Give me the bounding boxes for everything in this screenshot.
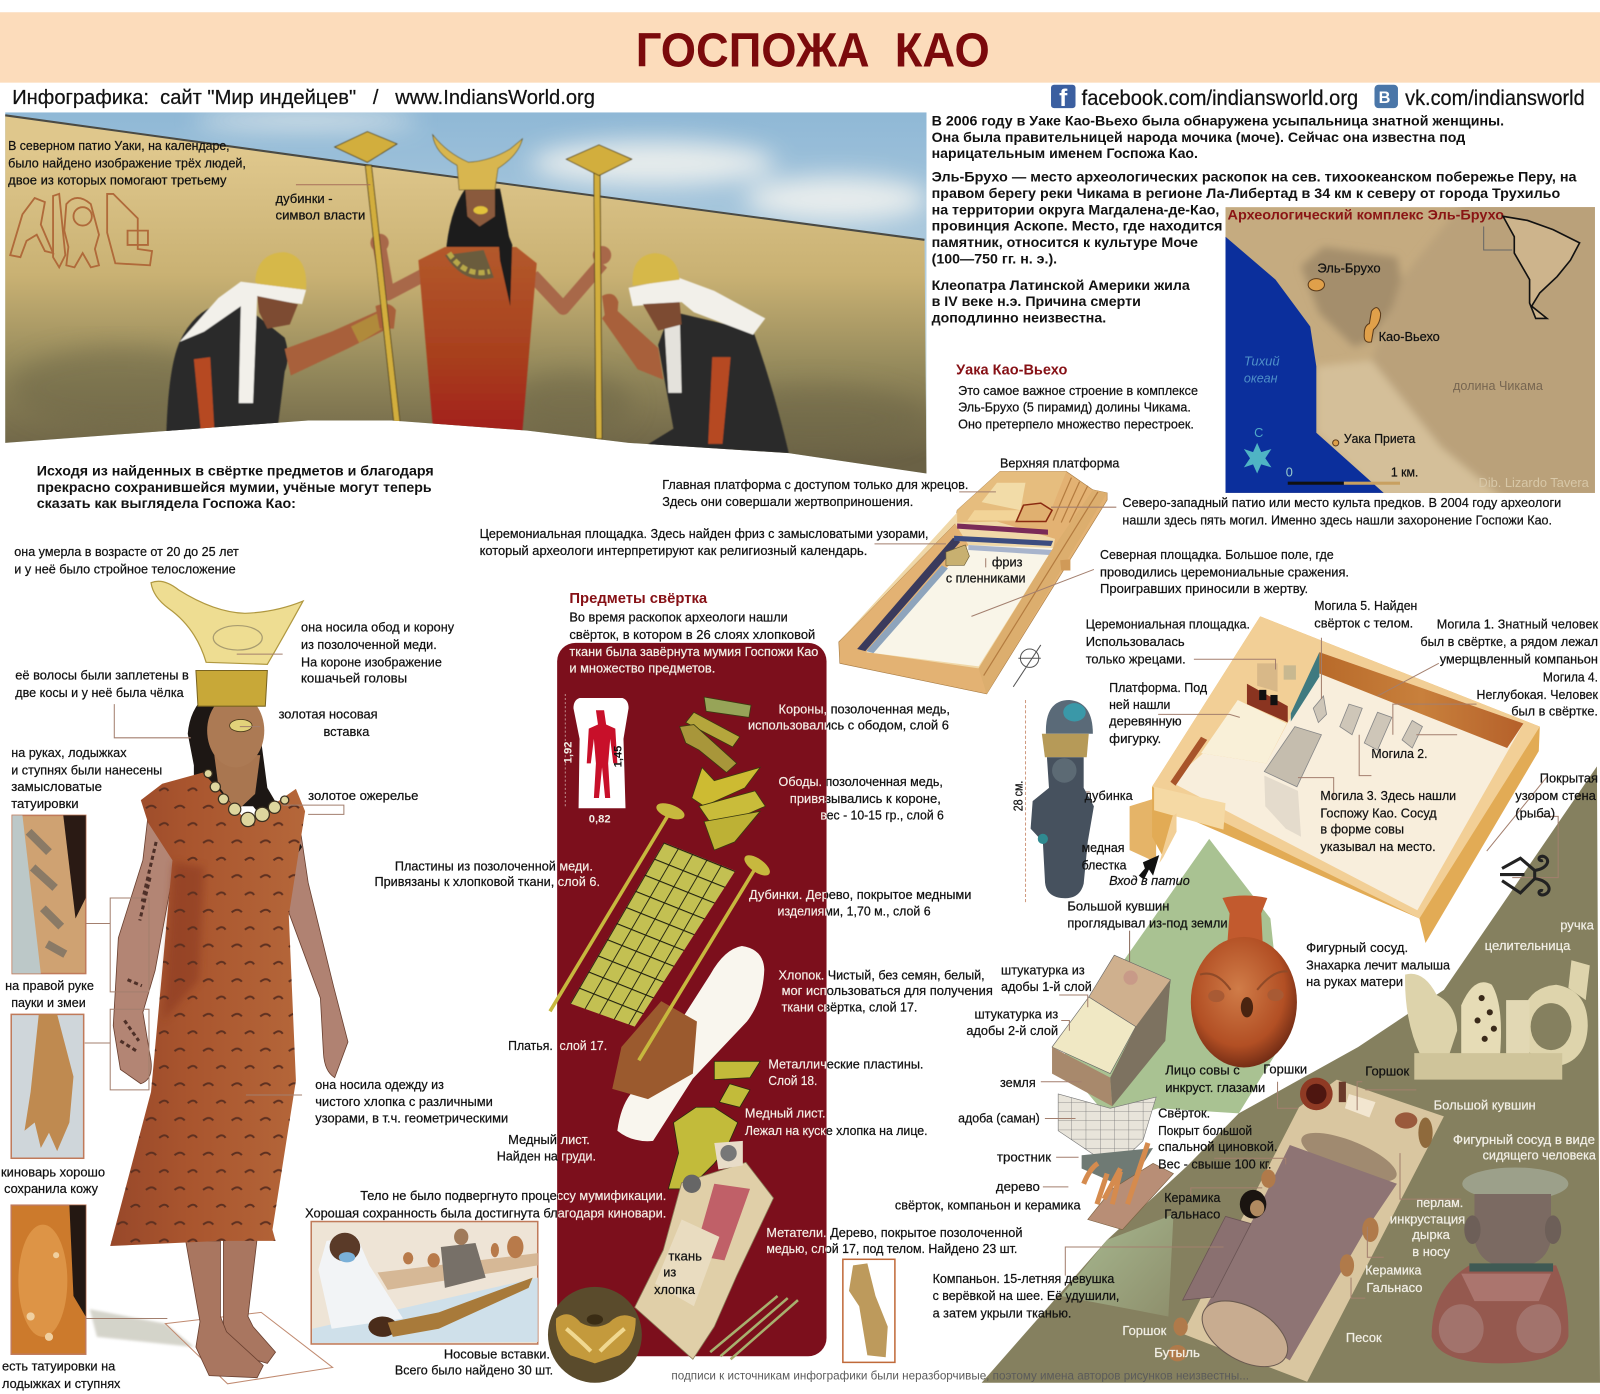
crown — [151, 581, 303, 664]
burial labels: Большой кувшин — [1434, 1097, 1536, 1112]
intro text right: провинция Аскопе. Место, где находится — [932, 219, 1222, 234]
head — [214, 755, 260, 811]
cross-section labels: штукатурка из — [974, 1006, 1058, 1021]
map: El Brujo complex: долина Чикама — [1453, 378, 1544, 393]
patio labels: умерщвленный компаньон — [1440, 651, 1598, 666]
intro text right: памятник, относится к культуре Моче — [932, 235, 1198, 250]
intro text right: Клеопатра Латинской Америки жила — [932, 278, 1190, 293]
burial labels: Горшок — [1365, 1064, 1410, 1079]
patio structure — [1130, 616, 1540, 943]
graves — [1264, 696, 1422, 787]
burial labels: Лицо совы с — [1165, 1063, 1240, 1078]
bundle labels: использовались с ободом, слой 6 — [748, 718, 949, 733]
lady captions — [1, 544, 508, 1391]
heading: Huaca Cao Viejo — [956, 363, 1198, 432]
lab photo — [311, 1222, 538, 1344]
companion photo — [843, 1259, 895, 1362]
bundle labels: изделиями, 1,70 м., слой 6 — [778, 903, 931, 918]
lady captions: сохранила кожу — [4, 1181, 99, 1196]
patio labels: Могила 5. Найден — [1314, 598, 1417, 613]
burial labels: Бутыль — [1154, 1345, 1200, 1360]
hero caption: было найдено изображение трёх людей, — [8, 155, 246, 170]
fish motif icon — [1500, 856, 1549, 895]
patio leader lines — [1058, 638, 1558, 878]
pots row — [1300, 1078, 1433, 1148]
healer vessel — [1405, 960, 1590, 1080]
pyramid labels: нашли здесь пять могил. Именно здесь нашли захоронение Госпожи Као. — [1122, 513, 1552, 528]
patio labels: Использовалась — [1086, 634, 1185, 649]
central figure — [370, 135, 611, 431]
clubs — [550, 801, 686, 1011]
bundle labels: Лежал на куске хлопка на лице. — [745, 1123, 928, 1138]
social links: facebook.com/indiansworld.org — [1082, 86, 1358, 110]
photo: foot — [11, 1205, 86, 1354]
lady captions: золотое ожерелье — [308, 788, 418, 803]
patio labels: только жрецами. — [1086, 651, 1186, 666]
cross-section labels: адоба (саман) — [958, 1111, 1040, 1126]
map: El Brujo complex — [1226, 207, 1595, 493]
cross-section labels: дерево — [996, 1179, 1040, 1194]
burial labels: Горшки — [1263, 1062, 1307, 1077]
pyramid labels: с пленниками — [946, 571, 1026, 586]
intro paragraph: сказать как выглядела Госпожа Као: — [37, 496, 296, 511]
lady captions: кошачьей головы — [301, 671, 407, 686]
lady captions: лодыжках и ступнях — [2, 1376, 121, 1391]
patio labels: узором стена — [1515, 788, 1597, 803]
burial labels: с верёвкой на шее. Её удушили, — [933, 1288, 1119, 1303]
entry arrow — [1139, 855, 1159, 880]
patio labels: ней нашли — [1109, 697, 1170, 712]
pyramid labels: который археологи интерпретируют как религиозный календарь. — [480, 543, 867, 558]
title band: ГОСПОЖА КАО — [636, 24, 990, 77]
entrance walls — [1154, 787, 1226, 863]
burial labels: Фигурный сосуд. — [1306, 940, 1408, 955]
bundle labels: Платья. слой 17. — [508, 1038, 607, 1053]
lady leader lines — [85, 654, 344, 1318]
intro text right: в IV веке н.э. Причина смерти — [932, 294, 1141, 309]
patio labels: в форме совы — [1320, 822, 1404, 837]
pyramid labels: Главная платформа с доступом только для жрецов. — [662, 477, 968, 492]
lady captions: замысловатые — [11, 779, 102, 794]
heading: Huaca Cao Viejo: Эль-Брухо (5 пирамид) долины Чикама. — [958, 399, 1191, 414]
pyramid labels: проводились церемониальные сражения. — [1100, 565, 1349, 580]
cross-section labels: свёрток, компаньон и керамика — [895, 1197, 1082, 1212]
burial labels: а затем укрыли тканью. — [933, 1305, 1071, 1320]
compass star — [1244, 443, 1271, 474]
bundle labels: Привязаны к хлопковой ткани, слой 6. — [374, 874, 600, 889]
lady cao figure — [90, 581, 348, 1384]
bundle labels: Ободы. позолоченная медь, — [779, 774, 943, 789]
lady captions: она носила одежду из — [315, 1077, 444, 1092]
map title: Археологический комплекс Эль-Брухо — [1228, 207, 1504, 223]
compass — [1013, 645, 1041, 687]
photo: hand — [11, 1014, 84, 1158]
patio labels: Могила 3. Здесь нашли — [1320, 788, 1456, 803]
map: El Brujo complex: Уака Приета — [1344, 431, 1416, 446]
cotton — [617, 946, 764, 1141]
bundle labels: Дубинки. Дерево, покрытое медными — [749, 887, 971, 902]
lady captions: и ступнях были нанесены — [11, 763, 162, 778]
intro text right: правом берегу реки Чикама в регионе Ла-Либертад в 34 км к северу от города Трухильо — [932, 186, 1560, 201]
intro paragraph: прекрасно сохранившейся мумии, учёные могут теперь — [37, 480, 432, 495]
necklace — [204, 769, 289, 827]
intro text right: Она была правительницей народа мочика (моче). Сейчас она известна под — [932, 130, 1466, 145]
pyramid labels: Церемониальная площадка. Здесь найден фриз с замысловатыми узорами, — [480, 526, 929, 541]
companion — [1183, 1190, 1266, 1300]
bundle labels: медью, слой 17, под телом. Найдено 23 шт. — [766, 1241, 1017, 1256]
hero caption: В северном патио Уаки, на календаре, — [8, 138, 230, 153]
intro text right — [932, 114, 1577, 325]
map: El Brujo complex: Dib. Lizardo Tavera — [1479, 475, 1590, 490]
panel: bundle contents: из — [663, 1265, 676, 1280]
burial labels: Знахарка лечит малыша — [1306, 957, 1451, 972]
bundle labels: Найден на груди. — [497, 1148, 596, 1163]
site markers — [1308, 279, 1381, 446]
ceramics — [1168, 1169, 1379, 1361]
intro text right: В 2006 году в Уаке Као-Вьехо была обнаружена усыпальница знатной женщины. — [932, 114, 1504, 129]
lady captions: из позолоченной меди. — [301, 637, 437, 652]
cross-section labels: адобы 1-й слой — [1001, 979, 1092, 994]
lady captions: она носила обод и корону — [301, 620, 455, 635]
patio labels: был в свёртке. — [1511, 703, 1598, 718]
panel heading: Во время раскопок археологи нашли — [569, 609, 788, 624]
map: El Brujo complex: 1 км. — [1391, 465, 1418, 480]
dress remains — [612, 1001, 697, 1099]
layered cross-section — [1052, 955, 1173, 1230]
panel: bundle contents — [550, 591, 827, 1359]
burial labels: Горшок — [1122, 1323, 1167, 1338]
panel: bundle contents: ткань — [668, 1248, 702, 1263]
burial labels: Песок — [1346, 1330, 1382, 1345]
lady captions: вставка — [323, 724, 370, 739]
pyramid labels: Северо-западный патио или место культа предков. В 2004 году археологи — [1122, 495, 1561, 510]
staffs — [335, 132, 632, 439]
label: clubs — [276, 185, 370, 222]
patio labels: был в свёртке, а рядом лежал — [1420, 634, 1598, 649]
metal sheets — [668, 1061, 760, 1189]
panel heading: ткани была завёрнута мумия Госпожи Као — [569, 644, 818, 659]
burial labels: на руках матери — [1306, 974, 1403, 989]
calendar figures — [10, 194, 152, 267]
social links — [1051, 85, 1585, 112]
crowns — [680, 697, 751, 773]
panel heading — [569, 591, 818, 676]
lady captions: чистого хлопка с различными — [315, 1094, 493, 1109]
map: El Brujo complex: Као-Вьехо — [1379, 329, 1440, 344]
cross-section labels: тростник — [997, 1149, 1051, 1164]
cross-section labels — [895, 963, 1092, 1212]
pyramid labels: Верхняя платформа — [1000, 455, 1120, 470]
burial labels: Гальнасо — [1164, 1206, 1220, 1221]
floor — [90, 1309, 333, 1384]
bundle labels: Носовые вставки. — [444, 1346, 550, 1361]
lady captions: татуировки — [11, 796, 79, 811]
map: El Brujo complex: океан — [1244, 371, 1278, 386]
patio labels: Церемониальная площадка. — [1086, 617, 1250, 632]
cross-section labels: штукатурка из — [1001, 963, 1085, 978]
panel heading: свёрток, в котором в 26 слоях хлопковой — [569, 627, 815, 642]
patio labels: Платформа. Под — [1109, 680, 1208, 695]
wooden statuette: 28 см. — [1010, 781, 1025, 811]
bundle labels: Всего было найдено 30 шт. — [395, 1363, 553, 1378]
social links: f — [1059, 85, 1068, 112]
panel heading: и множество предметов. — [569, 661, 715, 676]
panel: bundle contents: хлопка — [654, 1282, 696, 1297]
burial labels: инкрустация — [1390, 1212, 1465, 1227]
lady captions: и у неё было стройное телосложение — [14, 562, 236, 577]
panel heading: Предметы свёртка — [569, 591, 708, 607]
burial labels: целительница — [1485, 938, 1571, 953]
nose ornament medallion — [548, 1287, 642, 1383]
pyramid labels: фриз — [992, 554, 1023, 569]
pyramid labels: Северная площадка. Большое поле, где — [1100, 547, 1334, 562]
patio labels: (рыба) — [1515, 805, 1555, 820]
patio labels: Могила 1. Знатный человек — [1437, 617, 1598, 632]
burial labels — [933, 918, 1597, 1360]
hero caption — [8, 138, 246, 188]
pyramid labels: Проигравших приносили в жертву. — [1100, 581, 1308, 596]
lady captions: киноварь хорошо — [1, 1165, 105, 1180]
burial chamber — [1168, 1078, 1444, 1382]
lady captions: она умерла в возрасте от 20 до 25 лет — [14, 544, 239, 559]
brick altar — [1247, 663, 1296, 723]
burial labels: Фигурный сосуд в виде — [1453, 1132, 1595, 1147]
intro paragraph — [37, 464, 434, 511]
headbands — [692, 767, 765, 850]
map: El Brujo complex: С — [1254, 425, 1263, 440]
burial labels: Компаньон. 15-летняя девушка — [933, 1271, 1115, 1286]
credit line: Инфографика: сайт "Мир индейцев" / www.IndiansWorld.org — [12, 87, 595, 109]
bundle labels: привязывались к короне, — [790, 791, 941, 806]
owl jar: Большой кувшин — [1067, 898, 1169, 913]
patio labels: Неглубокая. Человек — [1477, 687, 1598, 702]
pyramid labels — [480, 455, 1561, 616]
lady captions: на правой руке — [5, 978, 94, 993]
metal plates grid — [570, 842, 735, 1027]
photo: arm — [12, 815, 86, 974]
terrain background — [982, 766, 1600, 1383]
heading: Huaca Cao Viejo: Это самое важное строение в комплексе — [958, 383, 1198, 398]
nose ornament — [230, 719, 252, 732]
hair — [188, 695, 302, 859]
bundle labels: Короны, позолоченная медь, — [779, 701, 950, 716]
lady captions: золотая носовая — [279, 706, 378, 721]
patio labels: Могила 4. — [1543, 670, 1598, 685]
patio labels — [1086, 598, 1598, 888]
mummy bundle — [635, 1141, 773, 1359]
source note: подписи к источникам инфографики были неразборчивые, поэтому имена авторов рисунков неизвестны... — [671, 1369, 1249, 1383]
map: El Brujo complex: 0 — [1286, 465, 1293, 480]
bundle labels: Медный лист. — [745, 1105, 826, 1120]
bundle size diagram: 1,92 — [562, 741, 574, 763]
burial labels: ручка — [1560, 918, 1595, 933]
lady captions: на руках, лодыжках — [11, 745, 127, 760]
patio labels: Могила 2. — [1371, 746, 1428, 761]
bundle labels: Слой 18. — [768, 1073, 817, 1088]
intro text right: нарицательным именем Госпожа Као. — [932, 146, 1198, 161]
burial labels: Свёрток. — [1158, 1105, 1210, 1120]
bundle labels — [305, 701, 1022, 1378]
wooden statuette — [1010, 700, 1134, 902]
wooden statuette: медная — [1082, 840, 1125, 855]
pyramid labels: Здесь они совершали жертвоприношения. — [662, 494, 913, 509]
patio labels: свёрток с телом. — [1314, 616, 1413, 631]
title band — [0, 12, 1600, 83]
burial labels: дырка — [1412, 1227, 1451, 1242]
intro text right: (100—750 гг. н. э.). — [932, 251, 1057, 266]
burial labels: Керамика — [1365, 1263, 1422, 1278]
burial labels: сидящего человека — [1483, 1147, 1597, 1162]
legs and feet — [223, 1230, 276, 1363]
scale bar — [1288, 482, 1400, 485]
lady captions: узорами, в т.ч. геометрическими — [315, 1111, 508, 1126]
tattoo photos — [11, 815, 86, 1354]
burial labels: Керамика — [1164, 1190, 1221, 1205]
hero illustration: three figures — [5, 112, 929, 480]
wooden statuette: блестка — [1082, 857, 1127, 872]
lady captions: На короне изображение — [301, 654, 442, 669]
seated figure vessel — [1432, 1167, 1568, 1363]
patio labels: указывал на место. — [1320, 839, 1436, 854]
burial labels: Покрыт большой — [1158, 1123, 1252, 1138]
burial labels: перлам. — [1416, 1195, 1463, 1210]
social links: В — [1379, 89, 1391, 107]
mat-covered bundle — [1191, 1123, 1402, 1380]
burial labels: спальной циновкой. — [1158, 1139, 1278, 1154]
label: clubs: символ власти — [276, 207, 365, 222]
bundle labels: вес - 10-15 гр., слой 6 — [820, 807, 944, 822]
map: El Brujo complex: Тихий — [1244, 353, 1280, 368]
bundle labels: Металлические пластины. — [768, 1056, 923, 1071]
intro paragraph: Исходя из найденных в свёртке предметов и благодаря — [37, 464, 434, 479]
hero caption: двое из которых помогают третьему — [8, 173, 227, 188]
burial labels: Вес - свыше 100 кг. — [1158, 1156, 1271, 1171]
map: El Brujo complex: Эль-Брухо — [1317, 260, 1381, 275]
spear throwers — [710, 1296, 798, 1359]
right attendant — [602, 253, 789, 453]
left attendant — [166, 252, 396, 434]
lady captions: есть татуировки на — [2, 1359, 116, 1374]
bundle size diagram — [562, 694, 629, 826]
bundle labels: Медный лист. — [508, 1132, 590, 1147]
bundle labels: Хорошая сохранность была достигнута благодаря киновари. — [305, 1205, 666, 1220]
heading: Huaca Cao Viejo: Уака Као-Вьехо — [956, 363, 1067, 379]
burial labels: Гальнасо — [1366, 1280, 1422, 1295]
bundle size diagram: 1,45 — [612, 746, 624, 767]
wooden statuette: дубинка — [1085, 788, 1134, 803]
patio labels: Госпожу Као. Сосуд — [1320, 805, 1437, 820]
bundle labels: Хлопок. Чистый, без семян, белый, — [779, 968, 985, 983]
intro text right: Эль-Брухо — место археологических раскопок на сев. тихоокеанском побережье Перу, на — [932, 170, 1577, 185]
patio labels: Покрытая — [1540, 771, 1598, 786]
bundle labels: Пластины из позолоченной меди. — [395, 858, 593, 873]
burial labels: в носу — [1412, 1244, 1451, 1259]
dress — [110, 773, 305, 1246]
lady captions: пауки и змеи — [11, 995, 86, 1010]
owl jar — [1067, 895, 1297, 1067]
patio labels: фигурку. — [1109, 731, 1161, 746]
frieze wall — [1319, 652, 1523, 748]
label: clubs: дубинки - — [276, 191, 333, 206]
cross-section labels: земля — [1000, 1075, 1036, 1090]
social links: vk.com/indiansworld — [1405, 86, 1585, 110]
lady captions: две косы и у неё была чёлка — [15, 685, 185, 700]
intro text right: доподлинно неизвестна. — [932, 310, 1106, 325]
heading: Huaca Cao Viejo: Оно претерпело множество перестроек. — [958, 417, 1194, 432]
bundle labels: Тело не было подвергнуто процессу мумификации. — [360, 1188, 666, 1203]
owl jar: проглядывал из-под земли — [1067, 916, 1228, 931]
burial labels: инкруст. глазами — [1165, 1080, 1265, 1095]
intro text right: на территории округа Магдалена-де-Као, — [932, 202, 1219, 217]
bundle size diagram: 0,82 — [589, 814, 611, 826]
pyramid model — [839, 471, 1107, 694]
arms — [113, 816, 176, 1084]
bundle labels: ткани свёртка, слой 17. — [782, 999, 917, 1014]
inset: South America — [1484, 216, 1580, 318]
bundle labels: Метатели. Дерево, покрытое позолоченной — [766, 1225, 1022, 1240]
patio labels: деревянную — [1109, 714, 1182, 729]
patio labels: Вход в патио — [1109, 873, 1190, 888]
bundle labels: мог использоваться для получения — [782, 983, 993, 998]
cross-section labels: адобы 2-й слой — [966, 1023, 1058, 1038]
club over cotton — [639, 852, 772, 1060]
lady captions: её волосы были заплетены в — [15, 668, 189, 683]
